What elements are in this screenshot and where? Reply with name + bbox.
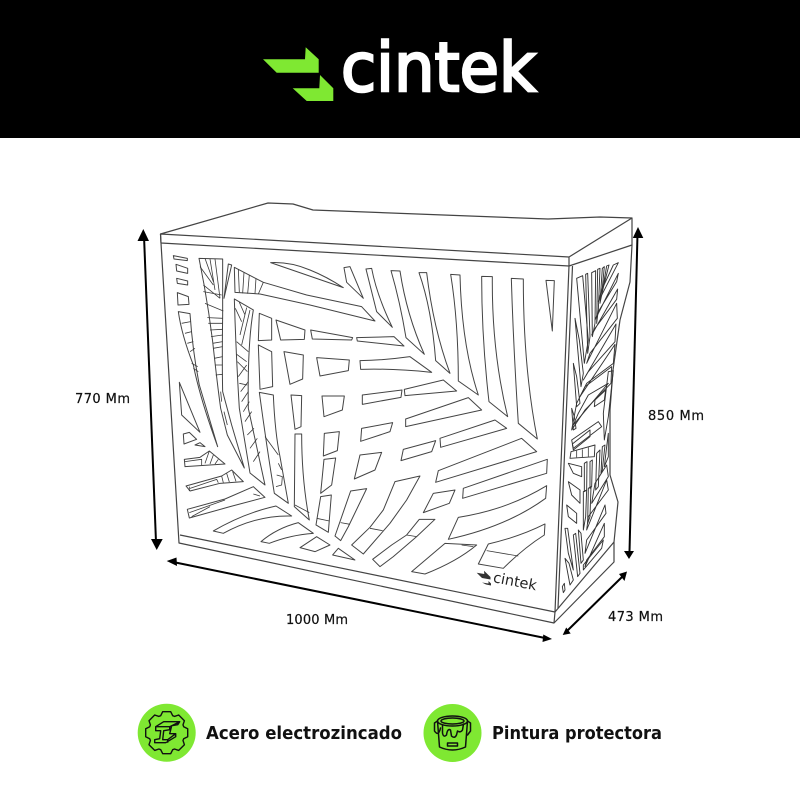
feature: electrogalvanized steel: [138, 704, 402, 762]
icon: small logo mark: [477, 571, 491, 586]
side panel leaf cutouts lower: [562, 430, 608, 593]
label: 770 Mm: 770 Mm: [75, 392, 130, 407]
arrow: height 850 mm: [624, 227, 643, 559]
front panel leaf cutouts lower right: [401, 420, 547, 574]
header band with logo: [0, 0, 800, 138]
icon: cintek logo mark: [263, 47, 333, 101]
small cintek logo on panel: [477, 570, 539, 594]
front panel leaf cutouts upper right: [391, 271, 554, 439]
logo wordmark: cintek: [341, 29, 537, 108]
label: 850 Mm: 850 Mm: [648, 409, 704, 424]
icon: gear and steel beam: [138, 704, 196, 762]
front panel leaf cutouts centre: [259, 337, 457, 541]
label: 1000 Mm: 1000 Mm: [286, 613, 348, 628]
feature: protective paint: [424, 704, 662, 762]
feature label: Acero electrozincado: [206, 724, 402, 744]
front panel leaf cutouts upper left: [173, 256, 392, 485]
small logo wordmark: cintek: [492, 570, 539, 594]
arrow: depth 473 mm: [563, 572, 627, 635]
product drawing: palm-leaf panel cover: [160, 203, 632, 623]
cabinet outline: [160, 203, 632, 623]
arrow: width 1000 mm: [167, 558, 552, 642]
front panel leaf cutouts lower left: [183, 432, 435, 567]
arrow: height 770 mm: [138, 229, 163, 550]
feature label: Pintura protectora: [492, 724, 662, 744]
side panel leaf cutouts upper: [572, 263, 618, 448]
icon: paint bucket: [424, 704, 482, 762]
label: 473 Mm: 473 Mm: [608, 610, 663, 625]
